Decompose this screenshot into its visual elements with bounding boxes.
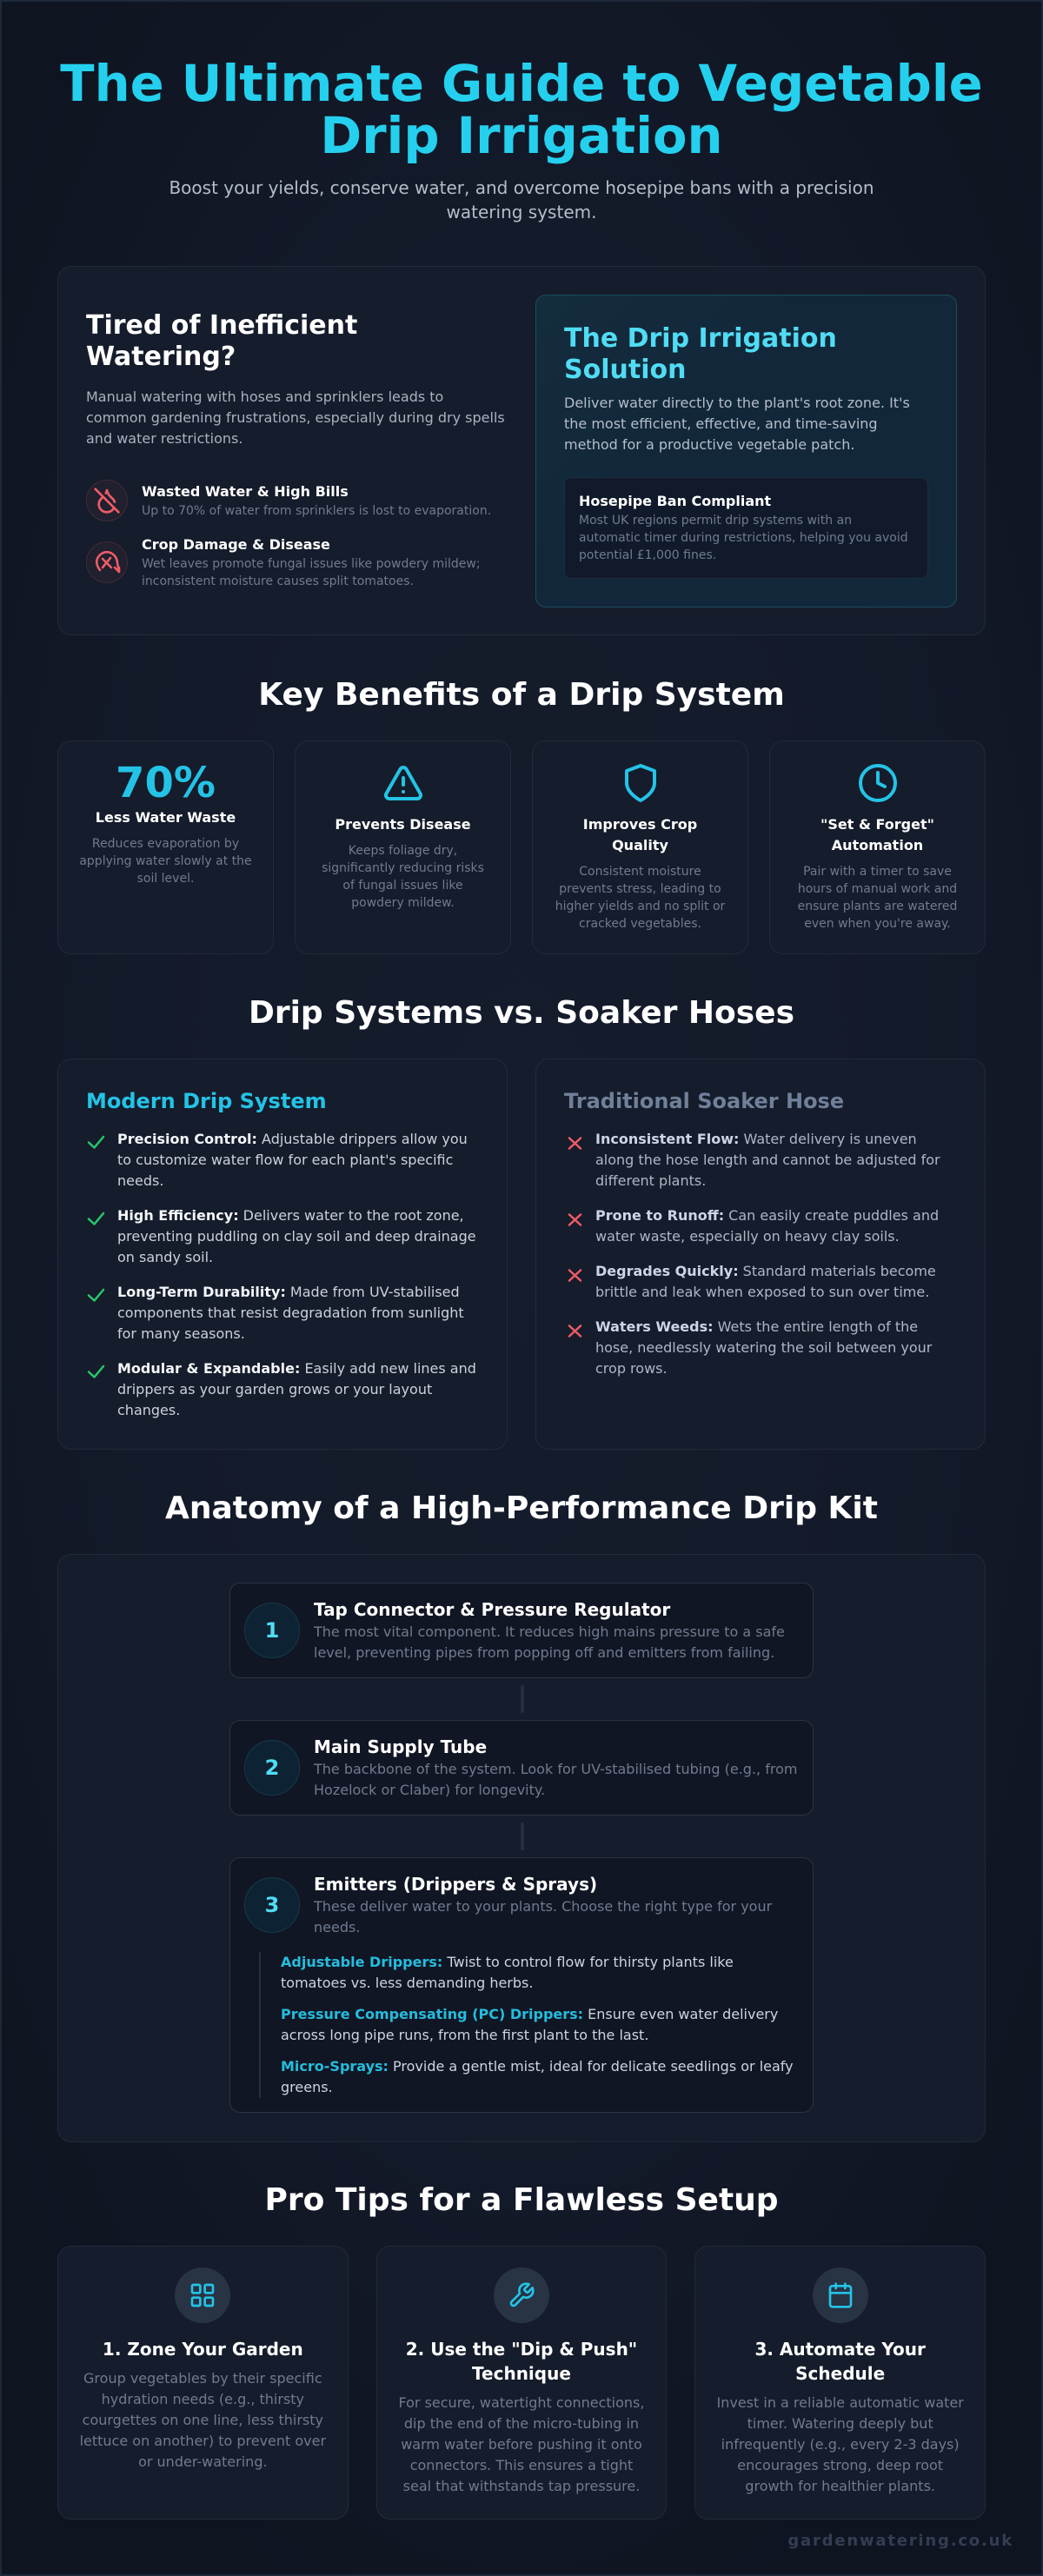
panel: anatomy of a drip kit [57,1554,986,2142]
emitter: micro-sprays: Micro-Sprays: Provide a gentle mist, ideal for delicate seedlings or leafy [281,2058,794,2075]
tip card: automate your schedule [694,2246,986,2520]
panel: drip irrigation solution [535,295,957,607]
number badge: 2 [265,1756,279,1780]
step description: Hozelock or Claber) for longevity. [314,1782,545,1798]
benefit description: applying water slowly at the [79,854,252,868]
emitter: pressure compensating [281,2004,778,2046]
check item: high efficiency: on sandy soil. [117,1249,213,1265]
item text: inconsistent moisture causes split tomatoes. [142,574,414,588]
title: The Ultimate Guide to Vegetable [60,55,983,113]
connector [521,1822,524,1850]
check item: precision control: needs. [117,1172,163,1189]
problem item: wasted water [86,480,491,521]
tip description: courgettes on one line, less thirsty [83,2412,323,2428]
icon: cross [568,1213,582,1226]
benefit title [583,816,697,853]
check item: modular [117,1360,476,1418]
benefit description: higher yields and no split or [555,900,725,913]
solution description: method for a productive vegetable patch. [564,436,854,453]
benefit title: Prevents Disease [335,816,471,833]
emitter: pressure compensating: across long pipe runs, from the first plant to the last. [281,2027,648,2043]
step title: Tap Connector & Pressure Regulator [314,1599,670,1620]
benefit card: set and forget [769,740,986,954]
benefit description: Keeps foliage dry, [349,844,457,858]
tip description: infrequently (e.g., every 2-3 days) [721,2436,960,2453]
emitter: adjustable drippers: tomatoes vs. less demanding herbs. [281,1975,533,1991]
benefit description: Consistent moisture [579,865,701,879]
check item: durability: Long-Term Durability: Made from UV-stabilised [117,1284,460,1300]
emitter: pressure compensating: Pressure Compensating (PC) Drippers: Ensure even water delivery [281,2006,778,2022]
benefit description [798,865,957,931]
callout: hosepipe ban compliant [564,477,928,579]
tip title: 2. Use the "Dip & Push" [406,2339,637,2360]
tip card: zone your garden [57,2246,349,2520]
item text: Wet leaves promote fungal issues like powdery mildew; [142,557,481,571]
benefit description: soil level. [137,872,194,886]
emitter: micro-sprays [281,2056,794,2098]
cross item: degrades: brittle and leak when exposed to sun over time. [595,1284,929,1300]
icon: check [87,1288,104,1302]
check item: durability: for many seasons. [117,1325,245,1342]
heading: tired of inefficient watering [86,310,357,372]
subtitle [169,177,874,222]
panel heading: Modern Drip System [86,1089,327,1113]
heading: key benefits: Key Benefits of a Drip System [258,677,785,713]
problem description [86,388,505,447]
panel heading: Traditional Soaker Hose [564,1089,844,1113]
icon: check [87,1212,104,1225]
benefit card: prevents disease [295,740,511,954]
number badge [244,1877,300,1933]
tip description: connectors. This ensures a tight [410,2457,633,2473]
callout text: automatic timer during restrictions, helping you avoid [579,531,908,545]
tip title [398,2337,645,2386]
heading: solution: The Drip Irrigation [564,323,837,354]
item text [142,483,491,518]
check item: high efficiency: High Efficiency: Delivers water to the root zone, [117,1207,464,1224]
benefit description [555,865,725,931]
tip description: lettuce on another) to prevent over [80,2433,326,2449]
tip card: dip and push [376,2246,667,2520]
check item: modular: drippers as your garden grows or your layout [117,1381,432,1398]
benefit description: ensure plants are watered [798,900,957,913]
solution description: Deliver water directly to the plant's root zone. It's [564,395,910,411]
tip description: encourages strong, deep root [737,2457,943,2473]
item text: Crop Damage & Disease [142,536,330,553]
panel: problem and solution [57,266,986,635]
step 2: main supply tube [229,1720,814,1816]
benefit title: "Set & Forget" [820,816,934,833]
subtitle: Boost your yields, conserve water, and overcome hosepipe bans with a precision [169,177,874,198]
tip description: For secure, watertight connections, [398,2394,644,2411]
step description [313,1623,785,1661]
benefit description: of fungal issues like [342,879,463,893]
heading: pro tips: Pro Tips for a Flawless Setup [264,2182,779,2218]
heading: anatomy: Anatomy of a High-Performance Drip Kit [165,1490,878,1526]
step 1: tap connector [229,1583,814,1678]
subtitle: watering system. [447,202,596,222]
icon: warning triangle [384,766,422,800]
cross item: weeds: crop rows. [595,1360,668,1377]
benefit description: even when you're away. [804,917,951,931]
cross item: weeds: hose, needlessly watering the soil between your [595,1339,932,1356]
heading: tired of inefficient watering: Tired of Inefficient [86,310,357,341]
item text: Up to 70% of water from sprinklers is lost to evaporation. [142,504,491,518]
tip description: warm water before pushing it onto [401,2436,642,2453]
cross item: runoff: Prone to Runoff: Can easily create puddles and [595,1207,939,1224]
tip description [695,2393,985,2497]
heading: comparison: Drip Systems vs. Soaker Hoses [249,995,794,1031]
cross item: degrades [595,1263,936,1300]
cross item: inconsistent flow [595,1131,940,1189]
check item: modular: changes. [117,1402,180,1418]
step description: These deliver water to your plants. Choose the right type for your [314,1898,772,1915]
step description: The most vital component. It reduces high mains pressure to a safe [314,1623,785,1640]
benefit description: Pair with a timer to save [803,865,952,879]
check item: durability [117,1284,464,1342]
cross item: weeds: Waters Weeds: Wets the entire length of the [595,1318,918,1335]
emitter: adjustable drippers [281,1952,734,1994]
benefit description: Reduces evaporation by [92,837,239,851]
tip description: Invest in a reliable automatic water [716,2394,964,2411]
step title: Main Supply Tube [314,1736,487,1757]
icon: shield [625,764,656,802]
callout title: Hosepipe Ban Compliant [579,493,771,509]
tip title [716,2337,964,2386]
benefit description: hours of manual work and [798,882,957,896]
icon: damaged crop [86,541,128,583]
panel: modern drip system [57,1059,508,1450]
emitter types list [259,1952,798,2098]
tip description [58,2368,348,2473]
heading: solution: Solution [564,355,686,385]
cross item: runoff: water waste, especially on heavy clay soils. [595,1228,900,1245]
stat: 70%: 70% [116,759,216,807]
callout text: Most UK regions permit drip systems with an [579,514,852,528]
benefit description: prevents stress, leading to [559,882,721,896]
step description: The backbone of the system. Look for UV-stabilised tubing (e.g., from [314,1761,797,1777]
check item: high efficiency: preventing puddling on clay soil and deep drainage [117,1228,476,1245]
icon: droplet off [86,480,128,521]
icon: cross [568,1325,582,1338]
benefit description: significantly reducing risks [322,861,484,875]
benefit title: Improves Crop [583,816,697,833]
tip description [377,2393,666,2497]
icon: check [87,1135,104,1149]
tip description: hydration needs (e.g., thirsty [102,2391,304,2407]
connector [521,1685,524,1713]
benefit description [322,844,484,910]
cross item: inconsistent flow: Inconsistent Flow: Water delivery is uneven [595,1131,917,1147]
number badge [244,1603,300,1658]
benefit card: improves crop quality [532,740,748,954]
step description: level, preventing pipes from popping off and emitters from failing. [314,1644,774,1661]
callout text: potential £1,000 fines. [579,548,716,562]
problem description: Manual watering with hoses and sprinklers leads to [86,388,443,405]
callout text [579,514,908,562]
problem description: common gardening frustrations, especially during dry spells [86,409,505,426]
solution description: the most efficient, effective, and time-saving [564,415,878,432]
cross item: runoff [595,1207,939,1245]
benefit description: powdery mildew. [351,896,455,910]
cross item: degrades: Degrades Quickly: Standard materials become [595,1263,936,1279]
benefit title: Less Water Waste [96,809,236,826]
tip title: 3. Automate Your [754,2339,926,2360]
icon: calendar [813,2267,868,2323]
step 3: emitters [229,1857,814,2113]
tip description: growth for healthier plants. [745,2478,935,2494]
item text: Wasted Water & High Bills [142,483,349,500]
tip title: Technique [472,2363,571,2384]
panel: traditional soaker hose [535,1059,986,1450]
icon: wrench [494,2267,549,2323]
number badge: 1 [265,1618,279,1643]
benefit title: Automation [832,837,923,853]
cross item: weeds [595,1318,932,1377]
emitter: adjustable drippers: Adjustable Drippers: Twist to control flow for thirsty plants like [281,1954,734,1970]
benefit description: cracked vegetables. [579,917,701,931]
step title: Emitters (Drippers & Sprays) [314,1874,597,1895]
watermark: gardenwatering.co.uk [787,2532,1013,2550]
item text [142,536,481,588]
check item: precision control: Precision Control: Adjustable drippers allow you [117,1131,468,1147]
heading: tired of inefficient watering: Watering? [86,342,236,372]
title: Drip Irrigation [320,107,723,165]
tip title: Schedule [795,2363,885,2384]
tip description: or under-watering. [138,2453,268,2470]
problem description: and water restrictions. [86,430,242,447]
icon: grid [175,2267,230,2323]
cross item: inconsistent flow: different plants. [595,1172,706,1189]
tip description: seal that withstands tap pressure. [403,2478,640,2494]
tip description: timer. Watering deeply but [747,2415,933,2432]
icon: cross [568,1269,582,1282]
icon: clock [859,764,897,802]
title [60,55,983,165]
benefit title [820,816,934,853]
tip title: 1. Zone Your Garden [103,2339,303,2360]
tip description: Group vegetables by their specific [83,2370,322,2387]
solution description [564,395,910,453]
benefit title: Quality [612,837,668,853]
check item: durability: components that resist degradation from sunlight [117,1305,464,1321]
step description: needs. [314,1919,360,1935]
heading: solution [564,323,837,385]
check item: modular: Modular & Expandable: Easily add new lines and [117,1360,476,1377]
icon: cross [568,1137,582,1150]
step description [313,1898,772,1935]
step description [313,1761,797,1798]
number badge: 3 [265,1893,279,1917]
check item: precision control [117,1131,468,1189]
benefit description [79,837,252,886]
check item: precision control: to customize water flow for each plant's specific [117,1152,453,1168]
tip description: dip the end of the micro-tubing in [404,2415,639,2432]
number badge [244,1740,300,1796]
problem item: crop damage [86,536,481,588]
cross item: inconsistent flow: along the hose length and cannot be adjusted for [595,1152,940,1168]
icon: check [87,1364,104,1378]
emitter: micro-sprays: greens. [281,2079,333,2095]
check item: high efficiency [117,1207,476,1265]
problem column [86,310,505,588]
benefit card: less water waste [57,740,274,954]
